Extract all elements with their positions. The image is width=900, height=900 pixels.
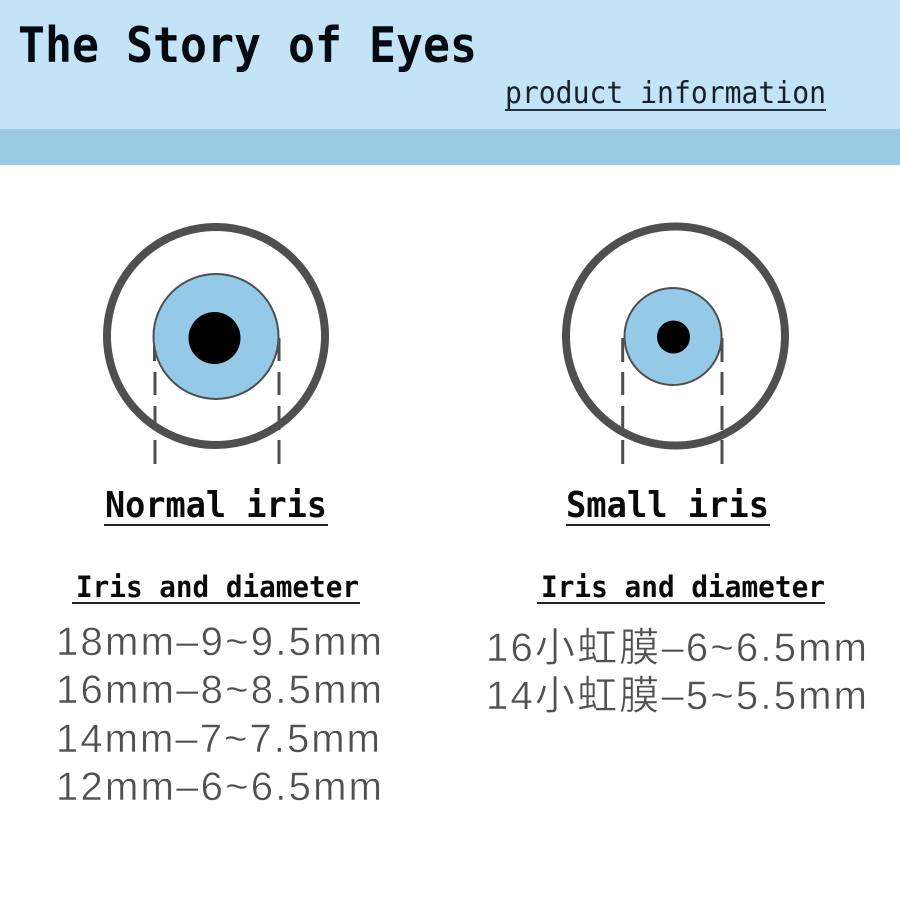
size list: normal iris	[56, 620, 382, 809]
heading: small iris: Small iris	[566, 485, 769, 526]
subtitle: product information: product information	[505, 76, 826, 111]
subheading: small iris and diameter: Iris and diameter	[541, 570, 825, 604]
diagram: small iris eye	[566, 226, 785, 464]
heading: normal iris: Normal iris	[105, 485, 327, 526]
size list: small iris: 14小虹膜–5~5.5mm	[486, 674, 867, 718]
size list: normal iris: 18mm–9~9.5mm	[56, 620, 382, 664]
subheading: normal iris and diameter: Iris and diameter	[76, 570, 359, 604]
size list: normal iris: 12mm–6~6.5mm	[56, 765, 382, 809]
diagram: normal iris eye	[107, 227, 325, 464]
title: The Story of Eyes	[18, 17, 477, 74]
size list: normal iris: 14mm–7~7.5mm	[56, 717, 380, 761]
size list: small iris: 16小虹膜–6~6.5mm	[486, 626, 867, 670]
size list: normal iris: 16mm–8~8.5mm	[56, 668, 382, 712]
size list: small iris	[486, 626, 867, 718]
header panel	[0, 0, 900, 165]
